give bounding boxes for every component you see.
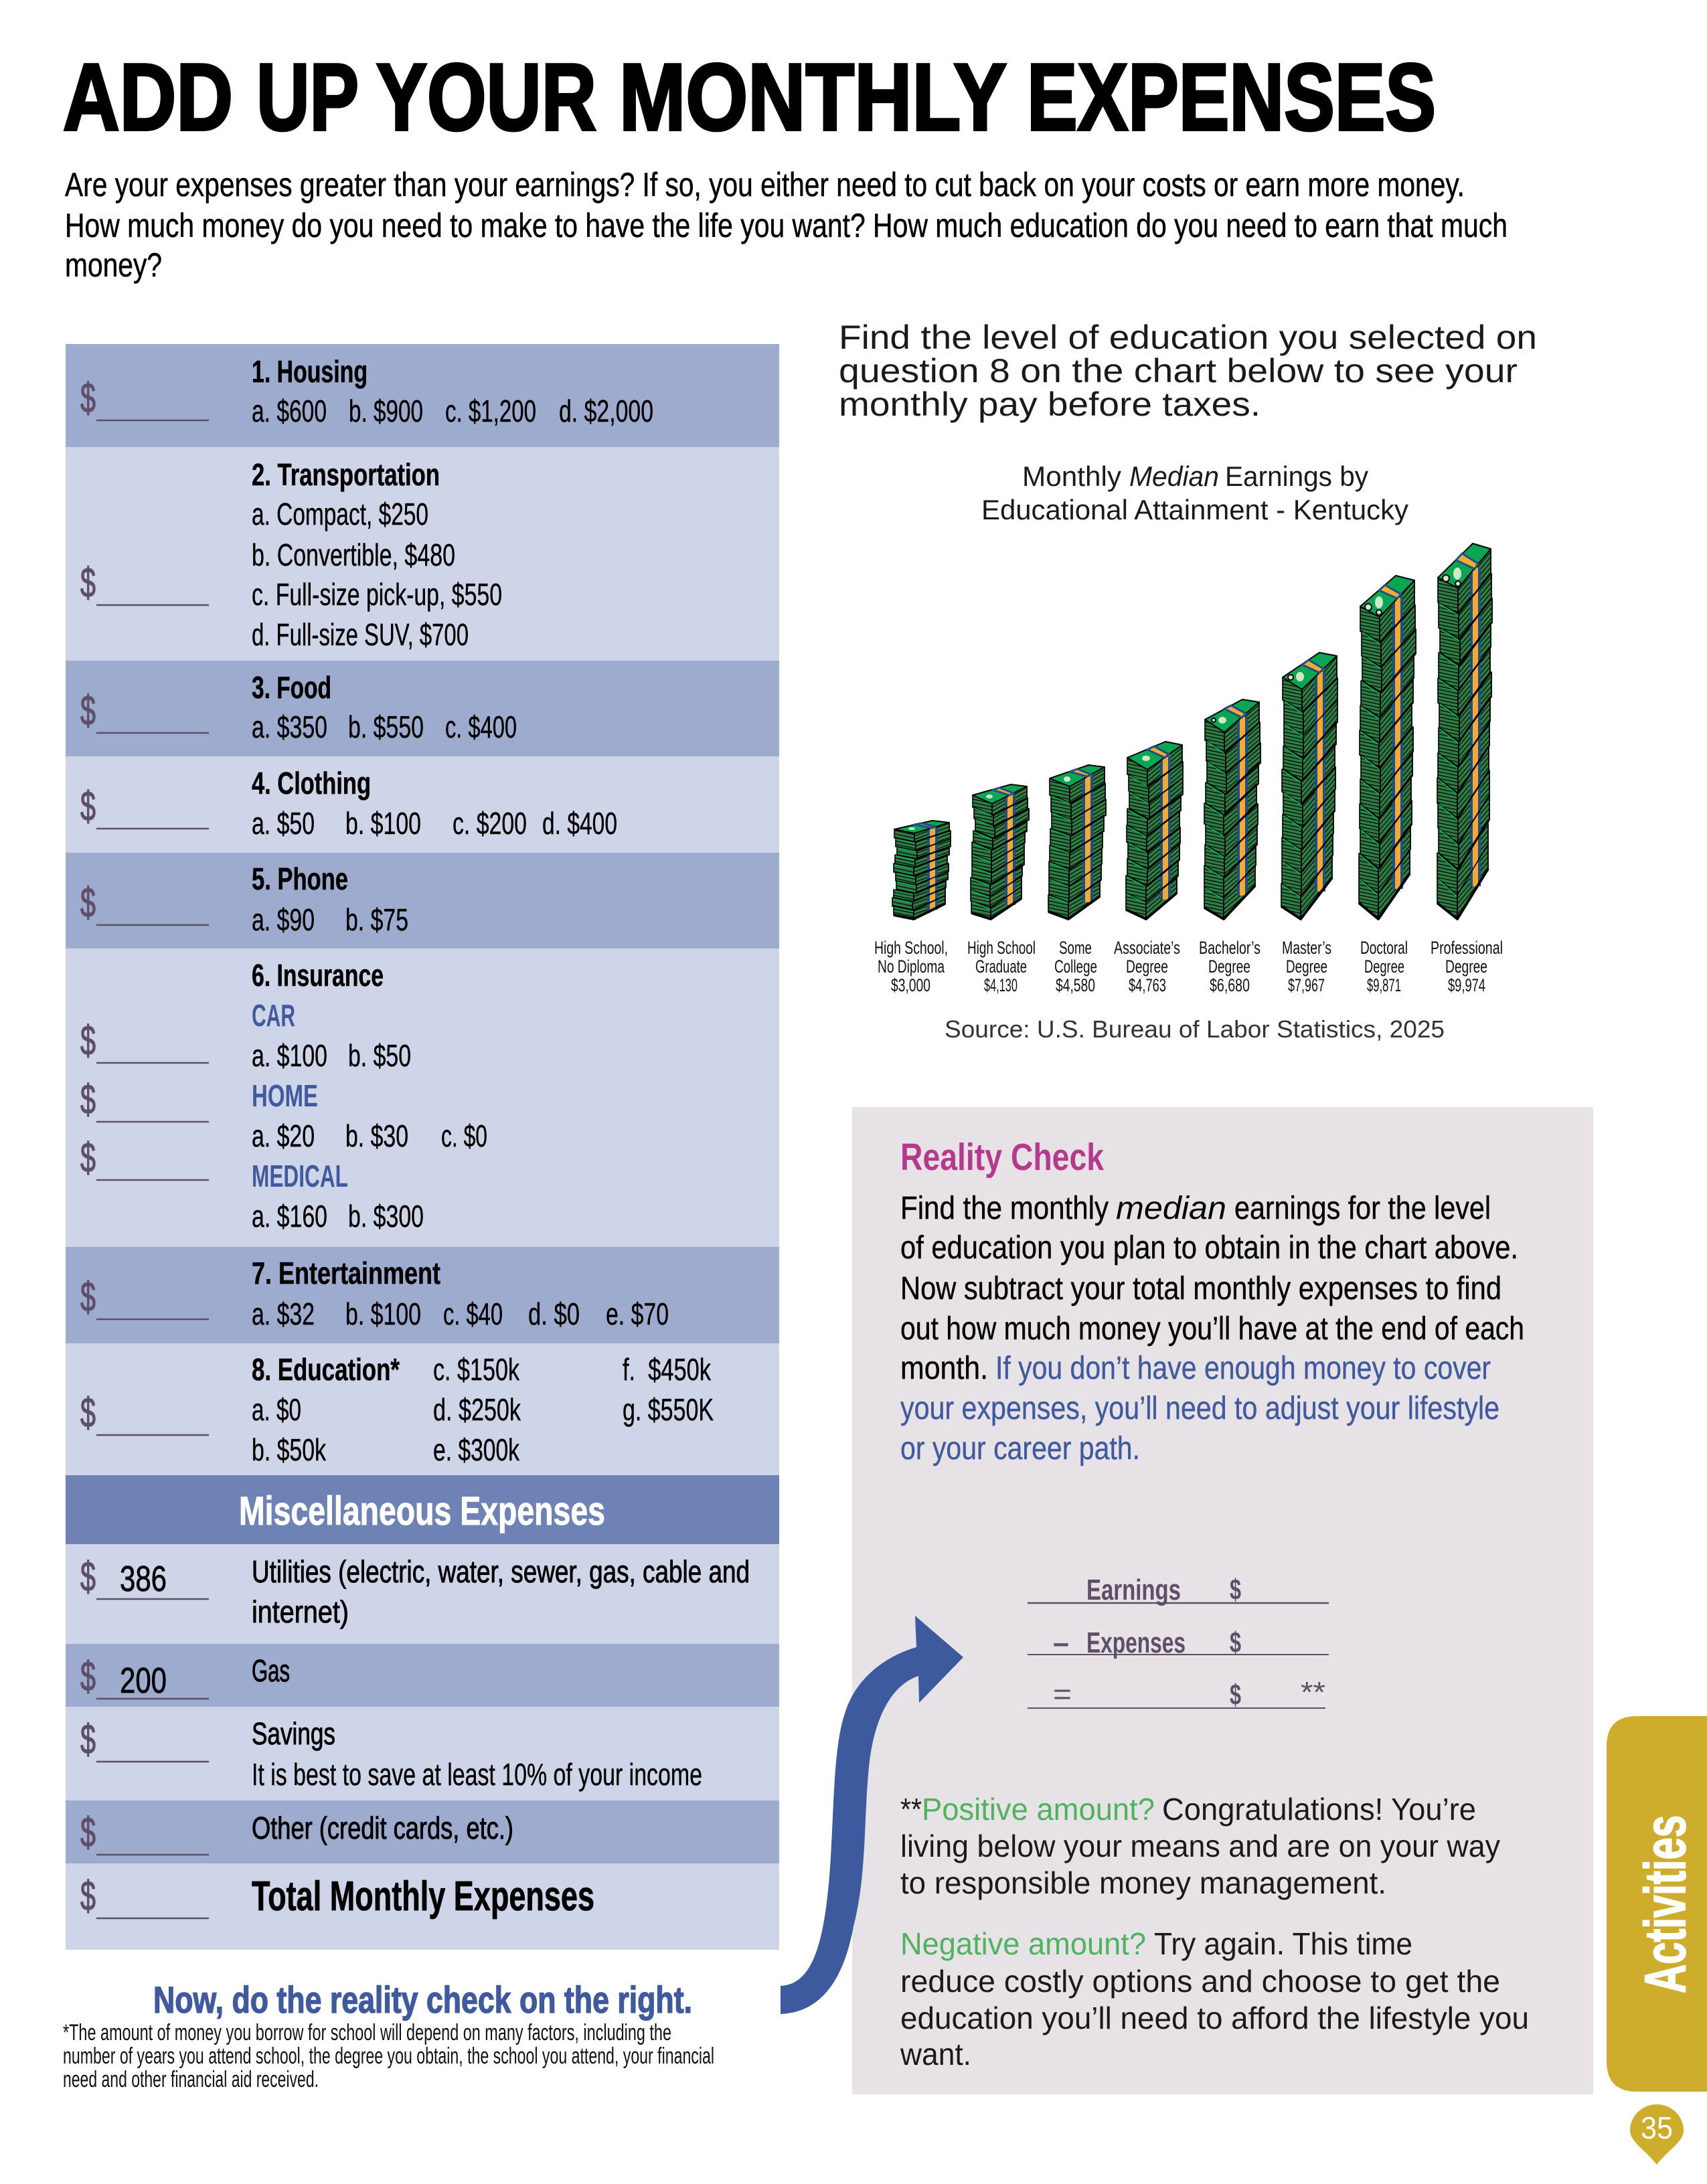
row: education: d. $250k [433,1392,521,1427]
reality check heading: Reality Check [900,1136,1104,1179]
panel: expenses worksheet [66,344,779,1950]
row: other: Other (credit cards, etc.) [252,1811,513,1845]
row: insurance: a. $100 [252,1038,327,1073]
positive amount note [900,1792,1500,1900]
subtraction worksheet: – [1053,1626,1069,1659]
row: clothing: d. $400 [542,806,617,841]
row: insurance: MEDICAL [252,1159,348,1193]
subtraction worksheet [1028,1574,1329,1711]
chart labels: Bachelor’s [1199,938,1261,958]
row: entertainment: b. $100 [345,1296,421,1331]
row: phone: b. $75 [345,902,408,937]
row: food: $ [80,688,96,734]
intro paragraph [65,166,1508,284]
positive amount note: living below your means and are on your way [900,1829,1500,1863]
row: insurance [66,948,779,1247]
chart labels: College [1054,956,1097,977]
page number marker: 35 [1641,2110,1673,2145]
row: education: a. $0 [252,1392,301,1427]
row: insurance: $ [80,1077,96,1123]
row: insurance: a. $20 [252,1118,315,1153]
row: utilities: internet) [252,1594,349,1629]
row: insurance: b. $300 [348,1199,424,1234]
reality check body: Find the monthly [900,1191,1109,1226]
chart labels: Graduate [975,956,1027,977]
chart labels [874,938,1503,995]
row: transportation: 2. Transportation [252,457,440,492]
footnote: need and other financial aid received. [63,2067,319,2092]
row: gas: $ [80,1654,96,1700]
positive amount note: Congratulations! You’re [1162,1792,1476,1827]
chart title: Median [1129,460,1219,492]
row: food: a. $350 [252,709,327,744]
chart labels: $9,974 [1448,975,1485,995]
row: entertainment: 7. Entertainment [252,1256,440,1290]
chart labels: Degree [1445,956,1487,977]
row: transportation: $ [80,560,96,606]
row: food: b. $550 [348,709,424,744]
row: transportation: b. Convertible, $480 [252,537,455,572]
row: transportation: a. Compact, $250 [252,497,428,531]
footnote [63,2020,714,2092]
subtraction worksheet: Expenses [1086,1626,1186,1659]
subtraction worksheet: $ [1230,1574,1241,1606]
row: savings: Savings [252,1716,335,1751]
chart instructions [839,319,1537,423]
row: housing: a. $600 [252,394,327,428]
row: clothing [66,756,779,853]
row: insurance: HOME [252,1078,318,1113]
row: phone [66,853,779,948]
row: food: 3. Food [252,670,331,705]
chart labels: Degree [1208,956,1250,977]
row: gas: 200 [120,1661,167,1701]
row: entertainment: c. $40 [443,1296,503,1331]
panel: reality check [852,1107,1593,2094]
row: utilities: Utilities (electric, water, sewer, gas, cable and [252,1554,750,1589]
subtraction worksheet: Earnings [1086,1574,1181,1606]
title: ADD [63,44,233,151]
row: education: c. $150k [433,1352,520,1387]
negative amount note: education you’ll need to afford the lifestyle you [900,2001,1529,2035]
title: YOUR [376,44,596,151]
chart title: Monthly [1022,460,1121,492]
negative amount note: want. [900,2037,971,2072]
subtraction worksheet: $ [1230,1679,1241,1711]
chart: money stacks by education [874,543,1503,995]
row: transportation: d. Full-size SUV, $700 [252,617,469,652]
chart labels: $4,130 [984,975,1018,995]
row: entertainment: a. $32 [252,1296,315,1331]
row: phone: $ [80,880,96,926]
chart labels: Degree [1364,956,1404,977]
row: gas: Gas [252,1653,290,1688]
row: total: Total Monthly Expenses [252,1873,594,1920]
negative amount note: Try again. This time [1154,1926,1412,1961]
chart instructions: monthly pay before taxes. [839,386,1261,423]
arrow to reality check [781,1616,963,2014]
row: clothing: c. $200 [453,806,527,841]
row: housing: b. $900 [349,394,423,428]
stack: master's degree [1281,653,1337,919]
reality check body: out how much money you’ll have at the end of each [900,1311,1524,1347]
row: entertainment: d. $0 [528,1296,580,1331]
chart instructions: Find the level of education you selected on [839,319,1537,356]
row: insurance: a. $160 [252,1199,327,1234]
stack: high school graduate [971,784,1029,919]
row: clothing: 4. Clothing [252,766,371,801]
row: utilities: 386 [120,1559,167,1599]
chart labels: Associate’s [1114,938,1180,958]
chart labels: High School [967,938,1036,958]
subtraction worksheet: = [1053,1678,1072,1711]
chart title [981,460,1408,525]
page number marker [1630,2104,1684,2165]
chart labels: $3,000 [891,975,930,995]
row: education: b. $50k [252,1432,327,1467]
row: clothing: a. $50 [252,806,315,841]
reality check body: or your career path. [900,1431,1140,1466]
subtraction worksheet: $ [1230,1626,1241,1659]
row: utilities: $ [80,1554,96,1600]
chart labels: $7,967 [1288,975,1325,995]
chart labels: Degree [1126,956,1168,977]
row: housing: c. $1,200 [445,394,536,428]
positive amount note: to responsible money management. [900,1865,1386,1900]
negative amount note: reduce costly options and choose to get the [900,1964,1500,1999]
stack: high school no diploma [892,821,951,919]
subtraction worksheet: ** [1301,1676,1325,1709]
reality check body: If you don’t have enough money to cover [995,1351,1491,1386]
row: education [66,1343,779,1475]
title: EXPENSES [1027,44,1436,151]
intro paragraph: money? [65,246,162,284]
row: phone: 5. Phone [252,861,348,896]
negative amount note [900,1926,1529,2072]
stack: associate's degree [1126,742,1183,919]
row: insurance: CAR [252,998,295,1033]
row: insurance: b. $50 [348,1038,411,1073]
title: UP [256,44,359,151]
callout: do the reality check: Now, do the reality check on the right. [153,1979,692,2021]
row: phone: a. $90 [252,902,315,937]
tab: activities [1607,1716,1707,2092]
row: education: $ [80,1390,96,1436]
chart labels: Some [1059,938,1092,958]
row: housing: $ [80,375,96,422]
row: entertainment: e. $70 [606,1296,669,1331]
row: housing [66,344,779,447]
negative amount note: Negative amount? [900,1926,1146,1961]
row: other [66,1800,779,1863]
reality check body [900,1191,1524,1466]
chart title: Educational Attainment - Kentucky [981,494,1408,525]
row: education: g. $550K [623,1392,714,1427]
row: total: $ [80,1873,96,1920]
row: entertainment: $ [80,1274,96,1321]
reality check body: of education you plan to obtain in the chart above. [900,1230,1518,1266]
row: gas [66,1644,779,1707]
row: transportation: c. Full-size pick-up, $550 [252,577,502,612]
title: MONTHLY [619,44,1007,151]
row: insurance: $ [80,1135,96,1181]
footnote: *The amount of money you borrow for school will depend on many factors, including the [63,2020,671,2045]
reality check body: Now subtract your total monthly expenses to find [900,1271,1501,1307]
reality check body: median [1116,1191,1226,1226]
chart labels: High School, [874,938,948,958]
chart labels: Master’s [1282,938,1331,958]
chart labels: Degree [1286,956,1327,977]
chart source: Source: U.S. Bureau of Labor Statistics, 2025 [945,1015,1445,1043]
heading: miscellaneous expenses [66,1475,779,1544]
positive amount note: ** [900,1792,922,1827]
row: education: 8. Education* [252,1352,400,1387]
reality check body: your expenses, you’ll need to adjust your lifestyle [900,1391,1499,1426]
row: housing: d. $2,000 [559,394,653,428]
chart labels: No Diploma [878,956,945,977]
row: education: e. $300k [433,1432,520,1467]
row: transportation [66,447,779,661]
row: food [66,661,779,756]
tab: activities: Activities [1633,1815,1698,1993]
stack: some college [1048,765,1106,919]
heading: miscellaneous expenses: Miscellaneous Expenses [239,1489,605,1533]
row: entertainment [66,1247,779,1343]
row: clothing: b. $100 [345,806,421,841]
reality check body: earnings for the level [1234,1191,1491,1226]
row: insurance: 6. Insurance [252,958,384,993]
chart labels: $4,763 [1129,975,1166,995]
chart labels: $9,871 [1367,975,1401,995]
row: savings [66,1707,779,1800]
row: savings: It is best to save at least 10% of your income [252,1757,702,1792]
chart labels: Doctoral [1360,938,1408,958]
row: education: f. $450k [623,1352,712,1387]
chart instructions: question 8 on the chart below to see your [839,352,1518,390]
title [63,44,1436,151]
row: total [66,1863,779,1950]
positive amount note: Positive amount? [922,1792,1155,1827]
row: insurance: b. $30 [345,1118,408,1153]
chart labels: $6,680 [1210,975,1250,995]
row: other: $ [80,1810,96,1856]
row: food: c. $400 [445,709,517,744]
row: savings: $ [80,1717,96,1763]
row: insurance: c. $0 [441,1118,487,1153]
row: utilities [66,1544,779,1644]
row: housing: 1. Housing [252,354,368,389]
chart title: Earnings by [1225,460,1368,492]
chart labels: Professional [1431,938,1503,958]
stack: professional degree [1437,543,1492,919]
footnote: number of years you attend school, the degree you obtain, the school you attend, your financial [63,2043,714,2069]
row: clothing: $ [80,784,96,830]
stack: doctoral degree [1359,576,1416,919]
stack: bachelor's degree [1204,699,1261,919]
chart labels: $4,580 [1056,975,1095,995]
reality check body: month. [900,1351,988,1386]
row: insurance: $ [80,1018,96,1064]
